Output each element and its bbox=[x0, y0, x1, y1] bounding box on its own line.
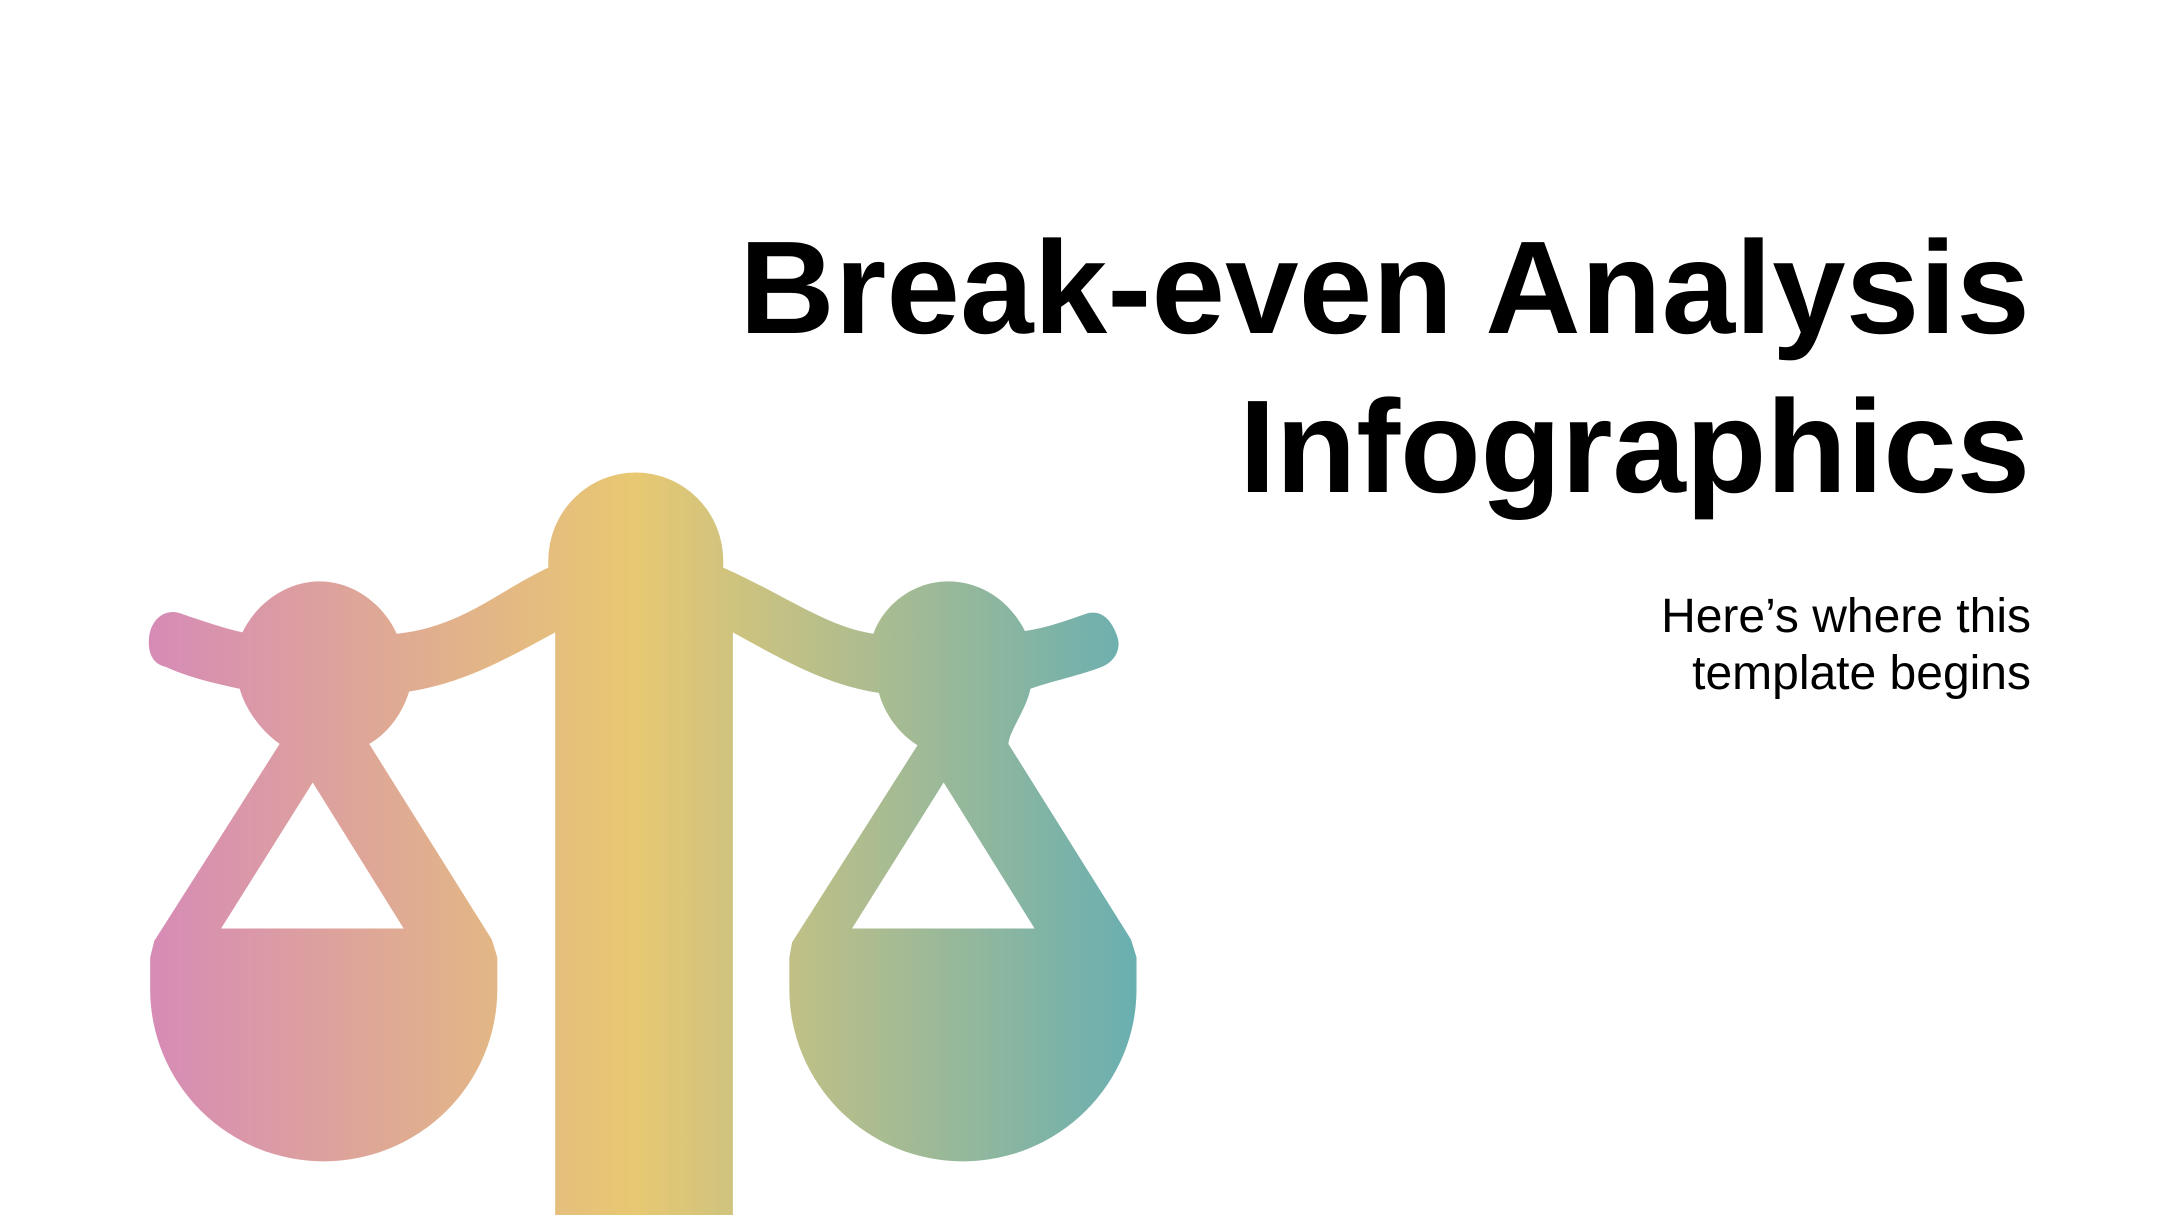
icon: balance scale bbox=[149, 473, 1137, 1215]
subtitle: template begins bbox=[1692, 647, 2031, 700]
title: Break-even Analysis bbox=[739, 214, 2030, 361]
title bbox=[739, 214, 2030, 520]
subtitle bbox=[1661, 590, 2031, 700]
subtitle: Here’s where this bbox=[1661, 590, 2031, 643]
title: Infographics bbox=[1239, 373, 2030, 520]
